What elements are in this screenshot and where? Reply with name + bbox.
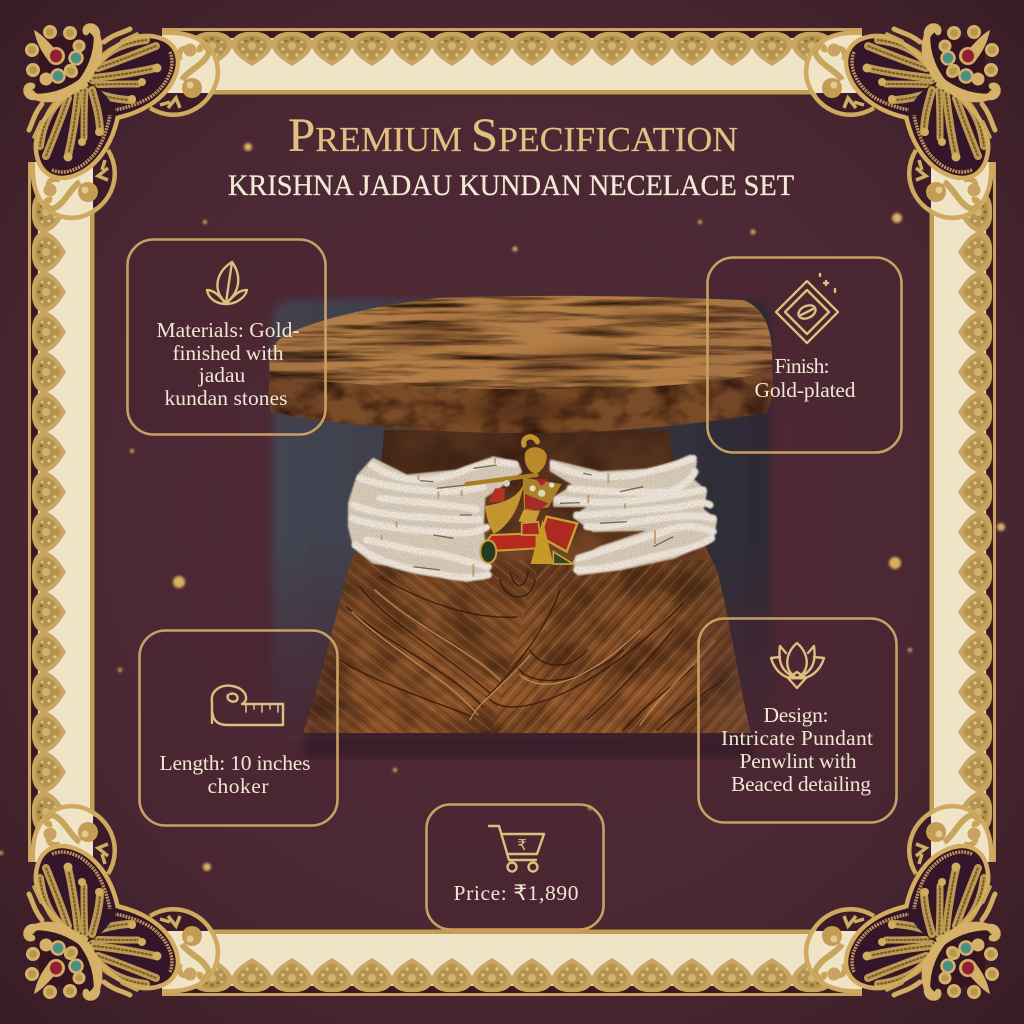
- necklace with Krishna pendant: [350, 437, 715, 580]
- waist: [518, 510, 540, 523]
- panel: price: [426, 804, 604, 930]
- design text: Penwlint with: [740, 749, 857, 773]
- right strands: [553, 458, 713, 570]
- green feet: [480, 540, 496, 563]
- materials text: Materials: Gold-: [156, 318, 300, 342]
- left strands: [352, 462, 515, 577]
- top border: [162, 28, 862, 94]
- pearl mass right: [552, 457, 715, 573]
- materials text: jadau: [198, 363, 246, 387]
- grain left: [300, 560, 540, 735]
- panel: length: [140, 630, 338, 826]
- gold bokeh specks: [0, 143, 1005, 871]
- icon: gold-plated diamond: [776, 274, 838, 343]
- finish text: Gold-plated: [754, 378, 856, 402]
- strand gaps: [413, 465, 673, 570]
- wood dark patches: [375, 314, 668, 424]
- icon: measuring tape: [212, 686, 283, 725]
- wooden stand shadow: [304, 733, 754, 759]
- finish text: Finish:: [774, 354, 830, 378]
- left border: [28, 162, 94, 862]
- corner ornament: bottom left: [26, 806, 218, 998]
- grain curves: [340, 572, 723, 730]
- icon: lotus: [771, 643, 824, 688]
- subtitle: KRISHNA JADAU KUNDAN NECELACE SET: [228, 169, 794, 202]
- table surface: [269, 296, 772, 389]
- panel: design: [698, 618, 896, 822]
- red sleeve: [488, 488, 505, 503]
- photo bottom fade: [262, 300, 782, 737]
- flute: [467, 475, 537, 484]
- legs: [483, 533, 537, 551]
- design text: Intricate Pundant: [721, 726, 873, 750]
- corner ornament: bottom right: [806, 806, 998, 998]
- design text: Beaced detailing: [731, 772, 871, 796]
- right border: [930, 162, 996, 862]
- icon: shopping cart: [489, 826, 544, 872]
- grain right: [490, 560, 760, 735]
- panel: materials: [128, 240, 326, 434]
- materials text: kundan stones: [164, 386, 288, 410]
- corner ornament: top left: [26, 26, 218, 218]
- title: PREMIUM SPECIFICATION: [288, 109, 738, 162]
- head: [525, 447, 547, 473]
- product photo: [262, 296, 782, 759]
- panel: finish: [708, 258, 902, 452]
- design text: Design:: [764, 703, 828, 727]
- corner ornament: top right: [806, 26, 998, 218]
- bottom border: [162, 930, 862, 996]
- plume: [524, 437, 537, 445]
- pearl mass left: [350, 458, 520, 580]
- icon: leaves: [207, 262, 247, 304]
- table rim: [269, 368, 773, 433]
- torso: [523, 477, 562, 511]
- pendant: Krishna: [467, 437, 577, 564]
- pearl strands: [350, 457, 715, 580]
- centre drape: [531, 519, 553, 564]
- price text: Price: ₹1,890: [454, 881, 578, 905]
- materials text: finished with: [172, 341, 284, 365]
- rupee sign on cart: ₹: [517, 838, 527, 854]
- photo backdrop: [273, 300, 770, 736]
- sash: [485, 483, 524, 534]
- length text: Length: 10 inches: [160, 751, 310, 775]
- length text: choker: [208, 774, 268, 798]
- wooden stand: [300, 425, 760, 735]
